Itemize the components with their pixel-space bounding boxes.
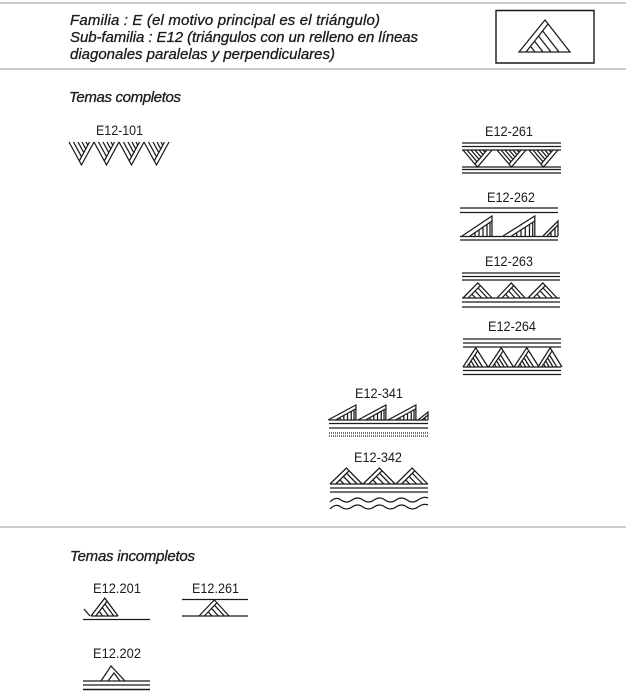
motif E12-342: E12-342 <box>354 449 402 465</box>
header divider <box>0 68 626 70</box>
motif E12.202 <box>83 645 150 690</box>
heading: incomplete themes: Temas incompletos <box>70 548 196 565</box>
motif E12-262: E12-262 <box>487 189 535 205</box>
motif E12-342 <box>330 449 428 509</box>
motif E12-261: E12-261 <box>485 123 533 139</box>
motif E12-101 <box>69 122 169 165</box>
heading: family description <box>70 12 418 63</box>
motif E12.261: E12.261 <box>192 580 239 596</box>
motif E12-262 <box>460 189 558 240</box>
motif E12-101: E12-101 <box>96 122 143 138</box>
motif E12.202: E12.202 <box>93 645 141 661</box>
motif E12-264: E12-264 <box>488 318 536 334</box>
top divider <box>0 2 626 4</box>
motif E12.201: E12.201 <box>93 580 141 596</box>
motif E12-264 <box>463 318 562 374</box>
heading: family description: Sub-familia : E12 (triángulos con un relleno en líneas <box>70 29 418 46</box>
motif E12-261 <box>462 123 561 173</box>
icon: family sample triangle in frame <box>496 10 594 63</box>
motif E12.201 <box>83 580 150 620</box>
heading: complete themes: Temas completos <box>69 89 182 106</box>
heading: family description: Familia : E (el motivo principal es el triángulo) <box>70 12 380 29</box>
motif E12-341 <box>328 385 428 436</box>
motif E12-263: E12-263 <box>485 253 533 269</box>
section divider <box>0 526 626 528</box>
motif E12.261 <box>182 580 248 616</box>
heading: family description: diagonales paralelas y perpendiculares) <box>70 46 335 63</box>
motif E12-263 <box>462 253 560 307</box>
motif E12-341: E12-341 <box>355 385 403 401</box>
